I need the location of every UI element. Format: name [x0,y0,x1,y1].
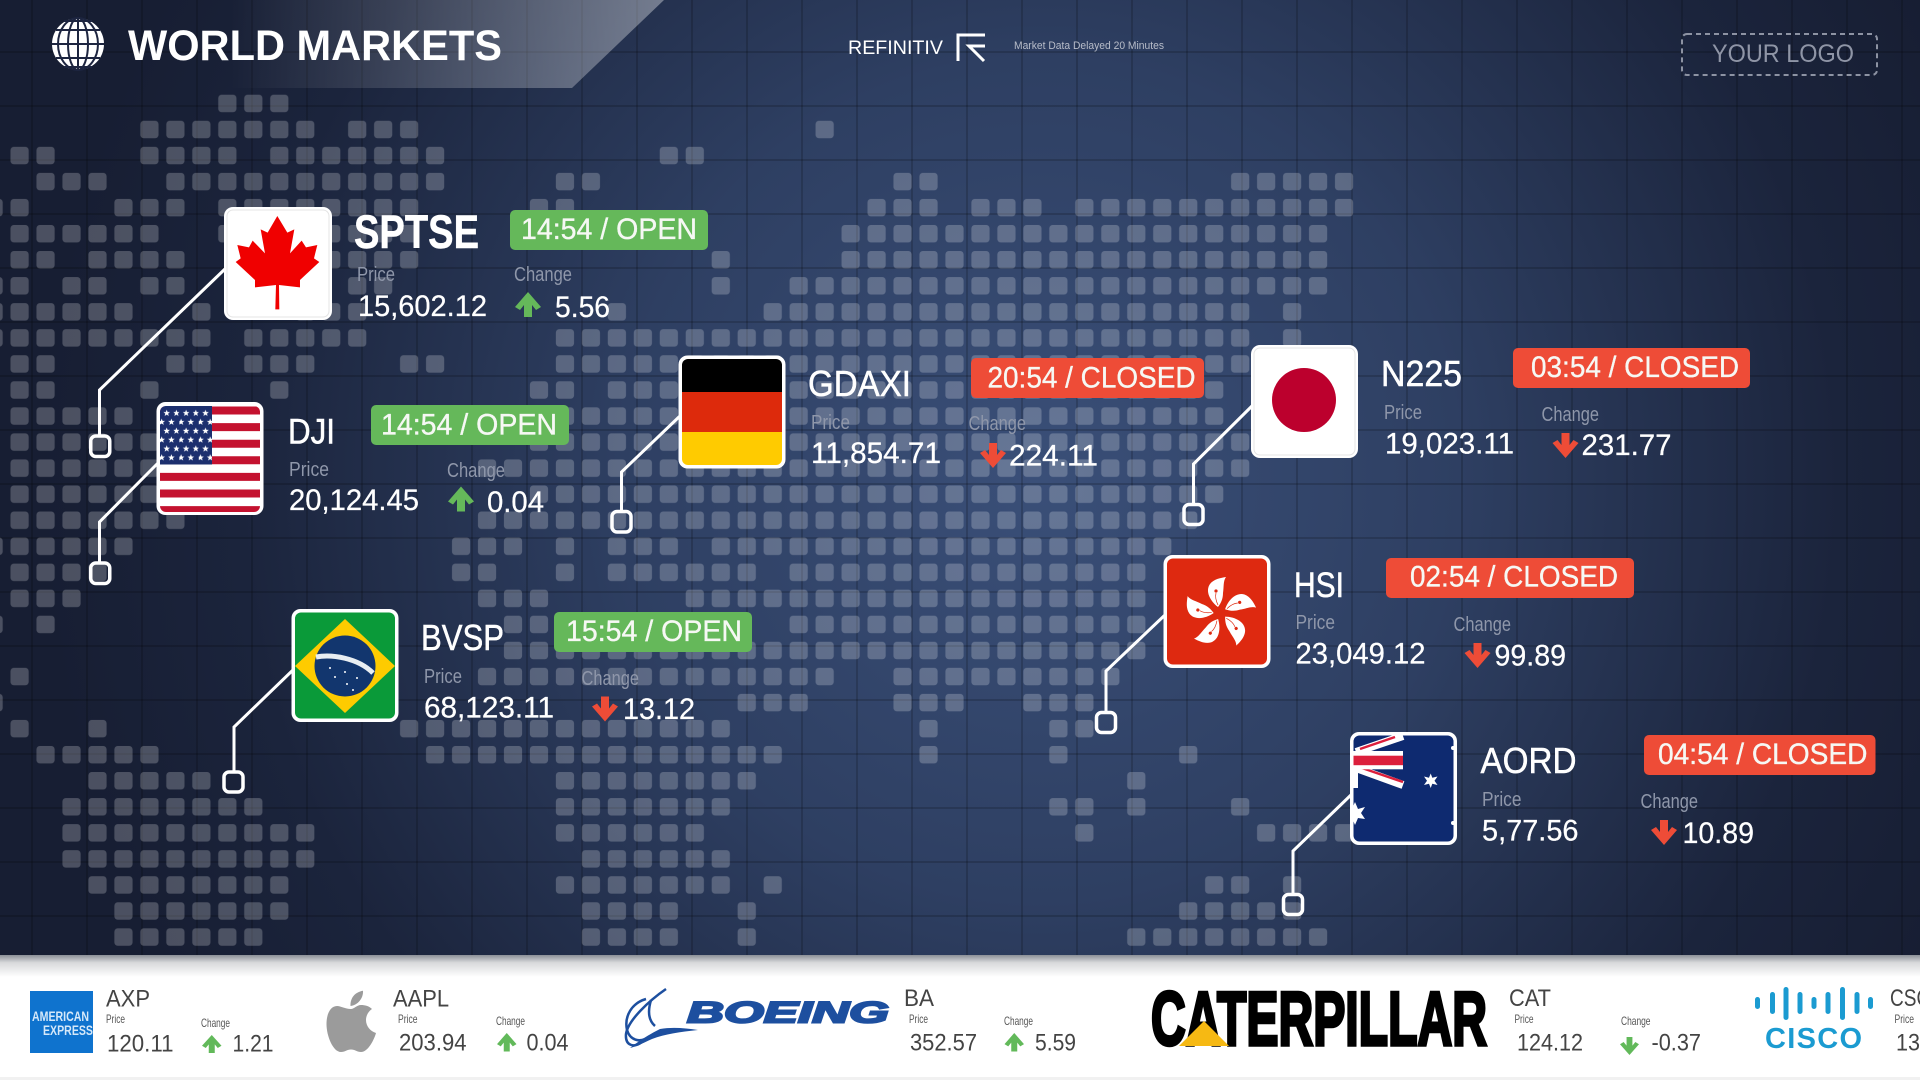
symbol and values: -0.37 [1652,1030,1701,1056]
flag: United States [156,402,264,515]
flag: Germany [678,356,786,468]
ticker band [0,955,1920,1080]
flag: Brazil [292,609,398,722]
symbol and values: AAPL [393,986,449,1012]
price: 11,854.71 [811,437,941,470]
flag: Australia [1345,732,1457,845]
price: 23,049.12 [1296,638,1426,670]
connector [1184,405,1253,524]
status badge: 04:54 / CLOSED [1658,738,1868,771]
name: GDAXI [808,363,911,404]
change: 224.11 [1009,440,1098,472]
status badge: 15:54 / OPEN [566,615,742,648]
logo: American Express: AMERICAN [32,1009,89,1024]
price: 5,77.56 [1482,814,1578,848]
change: 5.56 [555,291,610,324]
panel: BVSP Brazil [224,609,752,792]
symbol and values: 203.94 [399,1030,466,1056]
symbol and values: Change [1621,1014,1651,1028]
connector [91,463,158,584]
logo: Boeing: BOEING [687,996,889,1030]
price: 68,123.11 [424,692,554,724]
panel: GDAXI Germany [612,356,1204,532]
change: Change [1640,791,1698,813]
refinitiv logo: REFINITIV [848,38,943,59]
name: AORD [1480,740,1576,781]
symbol and values: 5.59 [1035,1030,1076,1056]
symbol and values: Price [398,1012,418,1026]
change [447,460,544,519]
change [582,668,695,726]
symbol and values [106,986,274,1058]
change [968,413,1098,472]
connector [612,415,681,532]
name: DJI [288,412,335,452]
symbol and values: Price [1514,1012,1534,1026]
price: Price [289,459,329,481]
change: Change [968,413,1026,435]
flag: Canada [224,207,332,320]
status badge: 03:54 / CLOSED [1531,351,1739,384]
price [1482,789,1578,848]
panel: HSI Hong Kong [1096,555,1634,732]
change: Change [1454,614,1511,636]
price: Price [424,666,462,688]
symbol and values [1509,985,1701,1056]
symbol and values: 352.57 [910,1030,977,1056]
logo: American Express [30,991,93,1053]
name: N225 [1381,353,1462,394]
price [1384,402,1514,460]
symbol and values [393,986,568,1056]
symbol and values: Change [1004,1014,1033,1028]
change: 99.89 [1494,640,1566,672]
your logo placeholder: YOUR LOGO [1712,40,1854,68]
symbol and values: Price [909,1012,928,1026]
symbol and values: 0.04 [526,1030,568,1056]
name: SPTSE [354,205,479,258]
price: Price [1482,789,1522,811]
symbol and values: CAT [1509,985,1551,1012]
price [1296,612,1426,670]
symbol and values: Price [106,1012,125,1026]
symbol and values: 1.21 [232,1030,274,1058]
name: HSI [1294,566,1344,605]
ticker: AXP [30,986,274,1058]
symbol and values: AXP [106,986,150,1012]
status badge: 20:54 / CLOSED [988,362,1196,394]
symbol and values [904,985,1076,1056]
refinitiv logo [848,35,985,61]
connector [1096,614,1166,732]
panel: AORD Australia [1284,732,1876,914]
dotted world map [0,90,1357,950]
flag: Japan [1251,345,1358,458]
symbol and values: BA [904,985,934,1012]
status badge: 02:54 / CLOSED [1410,560,1618,594]
symbol and values: 120.11 [107,1030,174,1058]
change: Change [447,460,505,482]
price: 20,124.45 [289,484,419,517]
name: BVSP [421,617,504,658]
change [1454,614,1566,672]
panel: N225 Japan [1184,345,1750,524]
price [289,459,419,517]
delay notice: Market Data Delayed 20 Minutes [1014,40,1164,52]
price [357,264,487,323]
logo: Cisco: CISCO [1765,1023,1862,1055]
change: 13.12 [623,693,695,726]
connector [1284,793,1353,914]
your logo placeholder [1682,34,1877,75]
symbol and values: Change [201,1016,230,1030]
ticker: BA [626,985,1076,1056]
change [514,264,610,324]
price: Price [1296,612,1335,634]
price: Price [811,412,850,434]
logo: Cisco [1755,987,1873,1055]
change: Change [582,668,639,690]
logo: Apple [326,991,376,1052]
price: 19,023.11 [1385,428,1514,460]
price: Price [1384,402,1422,424]
price [424,666,554,724]
change: Change [514,264,572,286]
symbol and values: Change [496,1014,525,1028]
ticker: CAT [1151,977,1701,1062]
logo: Caterpillar: CATERPILLAR [1151,977,1487,1062]
title: WORLD MARKETS [128,22,502,70]
header banner [200,0,664,88]
ticker: CSCO [1755,985,1920,1056]
panel: DJI United States [91,402,569,584]
symbol and values [1890,985,1920,1056]
status badge: 14:54 / OPEN [381,408,557,442]
panel: SPTSE Canada [91,205,708,456]
connector [224,669,294,792]
change: 231.77 [1582,429,1672,462]
price: Price [357,264,395,286]
logo: Boeing [626,989,889,1048]
logo: American Express: EXPRESS [43,1023,93,1038]
change [1640,791,1754,850]
ticker: AAPL [326,986,568,1056]
icon: globe [52,18,104,70]
connector [91,268,226,456]
price [811,412,941,470]
change [1542,404,1672,462]
change: 0.04 [487,486,544,519]
price: 15,602.12 [358,290,487,323]
flag: Hong Kong [1164,555,1270,668]
status badge: 14:54 / OPEN [521,213,697,246]
logo: Caterpillar [1151,977,1487,1062]
change: Change [1542,404,1599,426]
symbol and values: 124.12 [1517,1030,1583,1056]
change: 10.89 [1682,817,1754,850]
